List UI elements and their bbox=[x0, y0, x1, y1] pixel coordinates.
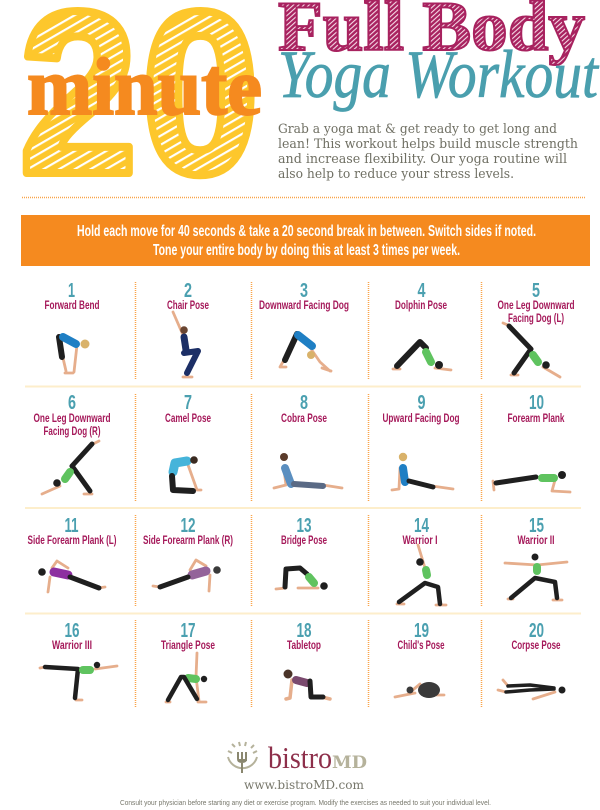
pose 14: Warrior I bbox=[397, 515, 446, 605]
pose 3: Downward Facing Dog: Downward Facing Dog bbox=[259, 298, 349, 312]
pose 16: Warrior III bbox=[40, 620, 117, 700]
pose 2: Chair Pose: 2 bbox=[184, 280, 192, 302]
intro text: and increase flexibility. Our yoga routine will bbox=[278, 152, 567, 167]
pose 1: Forward Bend: 1 bbox=[68, 280, 75, 302]
pose 4: Dolphin Pose: Dolphin Pose bbox=[395, 298, 447, 312]
pose 4: Dolphin Pose: 4 bbox=[418, 280, 426, 302]
pose 1: Forward Bend: Forward Bend bbox=[44, 298, 100, 312]
pose 2: Chair Pose bbox=[167, 280, 209, 377]
pose 4: Dolphin Pose bbox=[393, 280, 451, 370]
pose 12: Side Forearm Plank (R): Side Forearm Plank (R) bbox=[143, 533, 233, 547]
pose 13: Bridge Pose: 13 bbox=[296, 515, 312, 537]
pose 5: One Leg Downward Facing Dog (L) bbox=[498, 280, 574, 377]
word: minute: minute bbox=[27, 41, 262, 132]
pose 17: Triangle Pose: Triangle Pose bbox=[161, 638, 215, 652]
big hatched number 20 bbox=[19, 0, 260, 223]
instruction banner bbox=[21, 215, 590, 266]
pose 15: Warrior II: 15 bbox=[529, 515, 544, 537]
pose 6: One Leg Downward Facing Dog (R): Facing Dog (R) bbox=[44, 424, 100, 438]
pose 17: Triangle Pose: 17 bbox=[180, 620, 196, 642]
pose 18: Tabletop bbox=[284, 620, 330, 699]
pose 17: Triangle Pose bbox=[161, 620, 215, 702]
pose 19: Child's Pose bbox=[395, 620, 445, 698]
icon: fork in sunburst bbox=[228, 742, 257, 773]
pose 6: One Leg Downward Facing Dog (R): One Leg Downward bbox=[34, 411, 110, 425]
intro text: lean! This workout helps build muscle strength bbox=[278, 137, 579, 152]
website url: www.bistroMD.com bbox=[244, 778, 365, 792]
pose 15: Warrior II: Warrior II bbox=[518, 533, 554, 547]
pose 8: Cobra Pose: Cobra Pose bbox=[281, 411, 327, 425]
pose 3: Downward Facing Dog: 3 bbox=[300, 280, 308, 302]
pose 9: Upward Facing Dog: 9 bbox=[418, 392, 426, 414]
pose 19: Child's Pose: 19 bbox=[414, 620, 429, 642]
pose 20: Corpse Pose: Corpse Pose bbox=[512, 638, 561, 652]
pose 18: Tabletop: 18 bbox=[296, 620, 312, 642]
disclaimer: Consult your physician before starting any diet or exercise program. Modify the exercises as needed to suit your individual level. bbox=[120, 798, 491, 807]
pose 7: Camel Pose bbox=[165, 392, 211, 491]
pose 18: Tabletop: Tabletop bbox=[287, 638, 321, 652]
pose 6: One Leg Downward Facing Dog (R): 6 bbox=[68, 392, 76, 414]
pose 20: Corpse Pose bbox=[498, 620, 566, 699]
intro text bbox=[278, 122, 579, 182]
pose 6: One Leg Downward Facing Dog (R) bbox=[34, 392, 110, 494]
pose 7: Camel Pose: 7 bbox=[184, 392, 192, 414]
pose 9: Upward Facing Dog bbox=[382, 392, 460, 490]
pose 10: Forearm Plank: 10 bbox=[529, 392, 544, 414]
intro text: also help to reduce your stress levels. bbox=[278, 167, 514, 182]
pose 5: One Leg Downward Facing Dog (L): 5 bbox=[532, 280, 540, 302]
pose 16: Warrior III: 16 bbox=[64, 620, 80, 642]
pose 20: Corpse Pose: 20 bbox=[529, 620, 544, 642]
intro text: Grab a yoga mat & get ready to get long and bbox=[278, 122, 557, 137]
pose 19: Child's Pose: Child's Pose bbox=[398, 638, 445, 652]
pose 7: Camel Pose: Camel Pose bbox=[165, 411, 211, 425]
pose 16: Warrior III: Warrior III bbox=[52, 638, 92, 652]
pose 12: Side Forearm Plank (R) bbox=[143, 515, 233, 591]
pose 11: Side Forearm Plank (L): Side Forearm Plank (L) bbox=[28, 533, 116, 547]
pose 12: Side Forearm Plank (R): 12 bbox=[180, 515, 196, 537]
pose 15: Warrior II bbox=[505, 515, 567, 600]
pose 11: Side Forearm Plank (L): 11 bbox=[64, 515, 78, 537]
pose 14: Warrior I: 14 bbox=[414, 515, 430, 537]
pose 14: Warrior I: Warrior I bbox=[402, 533, 438, 547]
pose 1: Forward Bend bbox=[44, 280, 100, 373]
pose 5: One Leg Downward Facing Dog (L): Facing Dog (L) bbox=[508, 311, 564, 325]
bistroMD logo: MD bbox=[332, 753, 367, 773]
bistroMD logo: bistro bbox=[268, 740, 332, 775]
pose 9: Upward Facing Dog: Upward Facing Dog bbox=[382, 411, 460, 425]
pose 10: Forearm Plank: Forearm Plank bbox=[508, 411, 565, 425]
pose 8: Cobra Pose: 8 bbox=[300, 392, 308, 414]
pose 8: Cobra Pose bbox=[274, 392, 342, 488]
bistroMD logo bbox=[228, 740, 367, 775]
pose 3: Downward Facing Dog bbox=[259, 280, 349, 371]
pose 11: Side Forearm Plank (L) bbox=[28, 515, 116, 592]
pose 13: Bridge Pose: Bridge Pose bbox=[281, 533, 327, 547]
pose 13: Bridge Pose bbox=[276, 515, 328, 590]
pose 2: Chair Pose: Chair Pose bbox=[167, 298, 209, 312]
pose 10: Forearm Plank bbox=[493, 392, 570, 492]
